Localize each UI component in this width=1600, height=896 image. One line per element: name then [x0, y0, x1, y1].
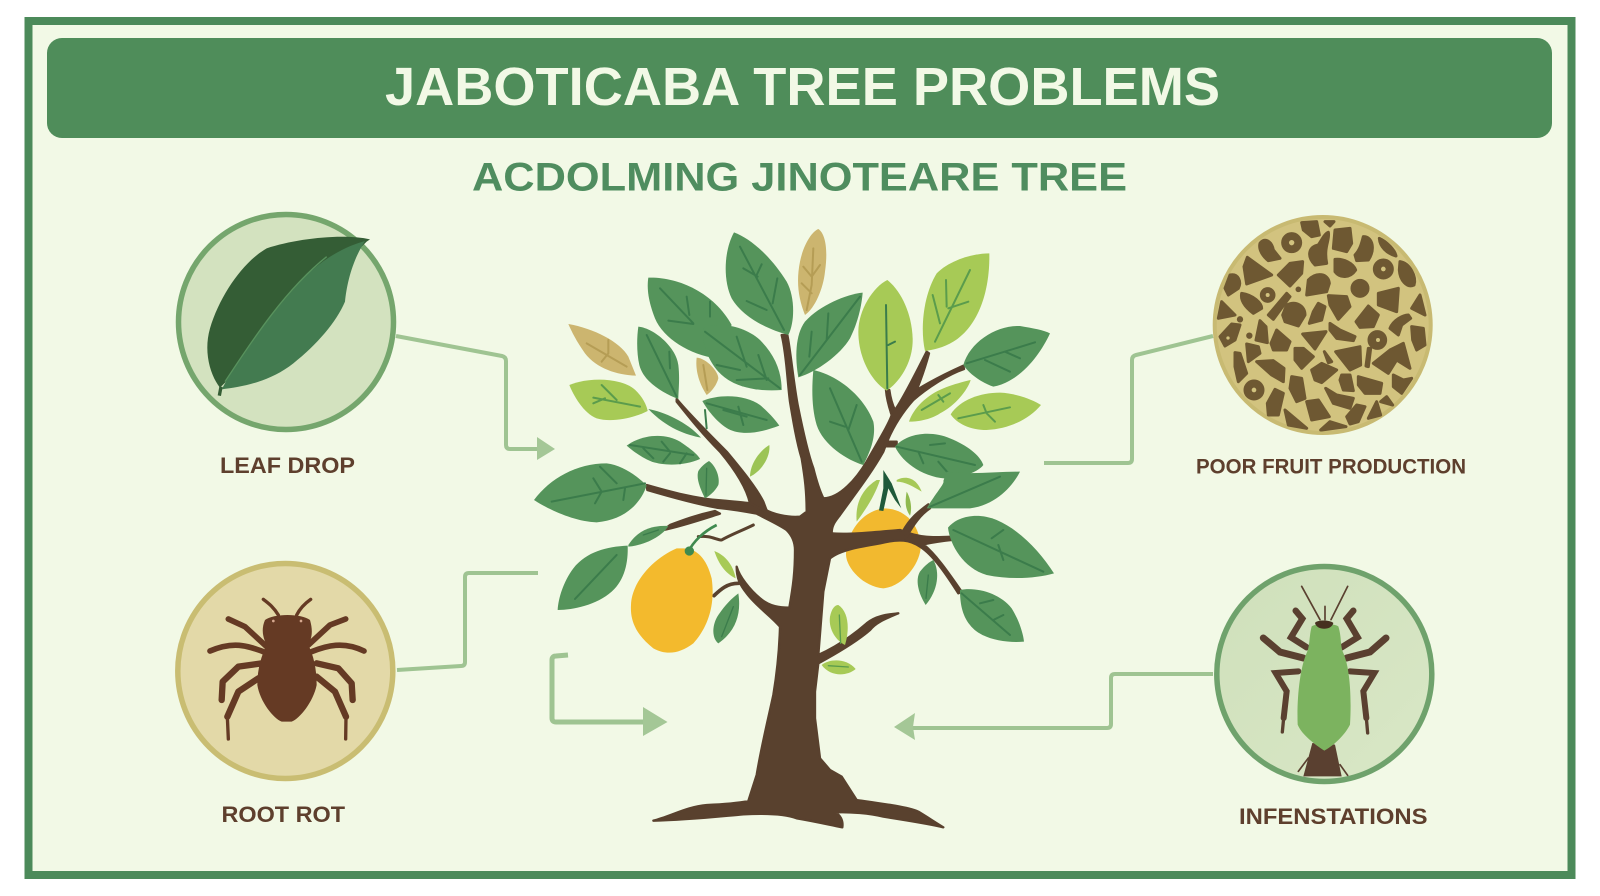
spider-like pest: [210, 599, 364, 739]
arrow: toward trunk from left: [552, 655, 668, 736]
title banner: [47, 38, 1552, 138]
tree trunk and main branches: [647, 335, 964, 827]
fruit: right orange: [846, 508, 921, 588]
connector: leaf drop to tree: [396, 336, 555, 460]
leaves: lower canopy: [558, 516, 1054, 674]
icon: poor fruit production circle: [1215, 217, 1431, 433]
label: poor fruit production: POOR FRUIT PRODUCTION: [1196, 456, 1466, 478]
icon: leaf drop circle: [178, 214, 394, 430]
fruit stem leaves: [856, 470, 922, 522]
label: root rot: ROOT ROT: [222, 802, 345, 827]
icon: infestations circle: [1217, 566, 1432, 782]
label: infestations: INFENSTATIONS: [1239, 804, 1428, 829]
connector: poor fruit production: [1044, 336, 1213, 463]
speckled fruit texture: [1218, 222, 1425, 430]
fruit: left orange: [631, 548, 713, 653]
left fruit stem: [685, 525, 717, 556]
label: leaf drop: LEAF DROP: [220, 453, 355, 478]
twig by left fruit: [698, 525, 753, 596]
green insect: [1263, 586, 1386, 776]
subtitle: ACDOLMING JINOTEARE TREE: [472, 156, 1127, 200]
tree illustration: [534, 229, 1054, 827]
connector: root rot: [397, 573, 538, 670]
leaf glyph: [207, 237, 370, 396]
leaves: upper canopy: [534, 229, 1050, 522]
icon: root rot circle: [178, 564, 393, 778]
title: JABOTICABA TREE PROBLEMS: [385, 58, 1220, 117]
arrow: infestations to trunk: [894, 674, 1213, 740]
